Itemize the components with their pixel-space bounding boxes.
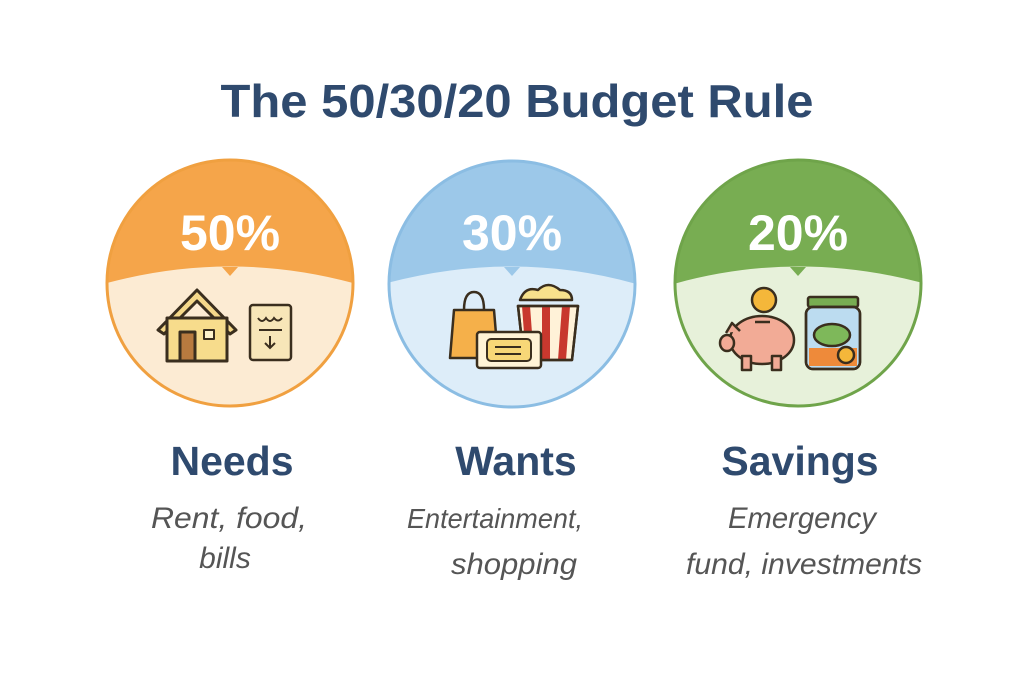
icon: piggy bank [720,288,794,370]
label: savings: Emergency [728,502,878,535]
panel: savings circle [670,150,930,406]
icon: bill [250,305,291,360]
icon: shopping bag, popcorn, ticket [450,285,578,368]
label: wants: Entertainment, [407,503,583,534]
panel: needs circle [100,150,360,406]
icon: money jar [806,297,860,369]
label: needs: Rent, food, [151,502,307,535]
label: savings: fund, investments [686,548,922,581]
label: savings [686,438,922,581]
label: savings: Savings [721,438,879,484]
percent: 20%: 20% [748,205,848,261]
label: needs: Needs [170,438,294,484]
label: wants: Wants [455,438,577,484]
panel: wants circle [380,150,640,407]
percent: 50%: 50% [180,205,280,261]
label: wants: shopping [451,548,577,581]
label: needs: bills [199,542,251,575]
percent: 30%: 30% [462,205,562,261]
label: wants [407,438,583,581]
label: needs [151,438,307,575]
icon: house [158,290,236,361]
title: The 50/30/20 Budget Rule [220,75,814,127]
